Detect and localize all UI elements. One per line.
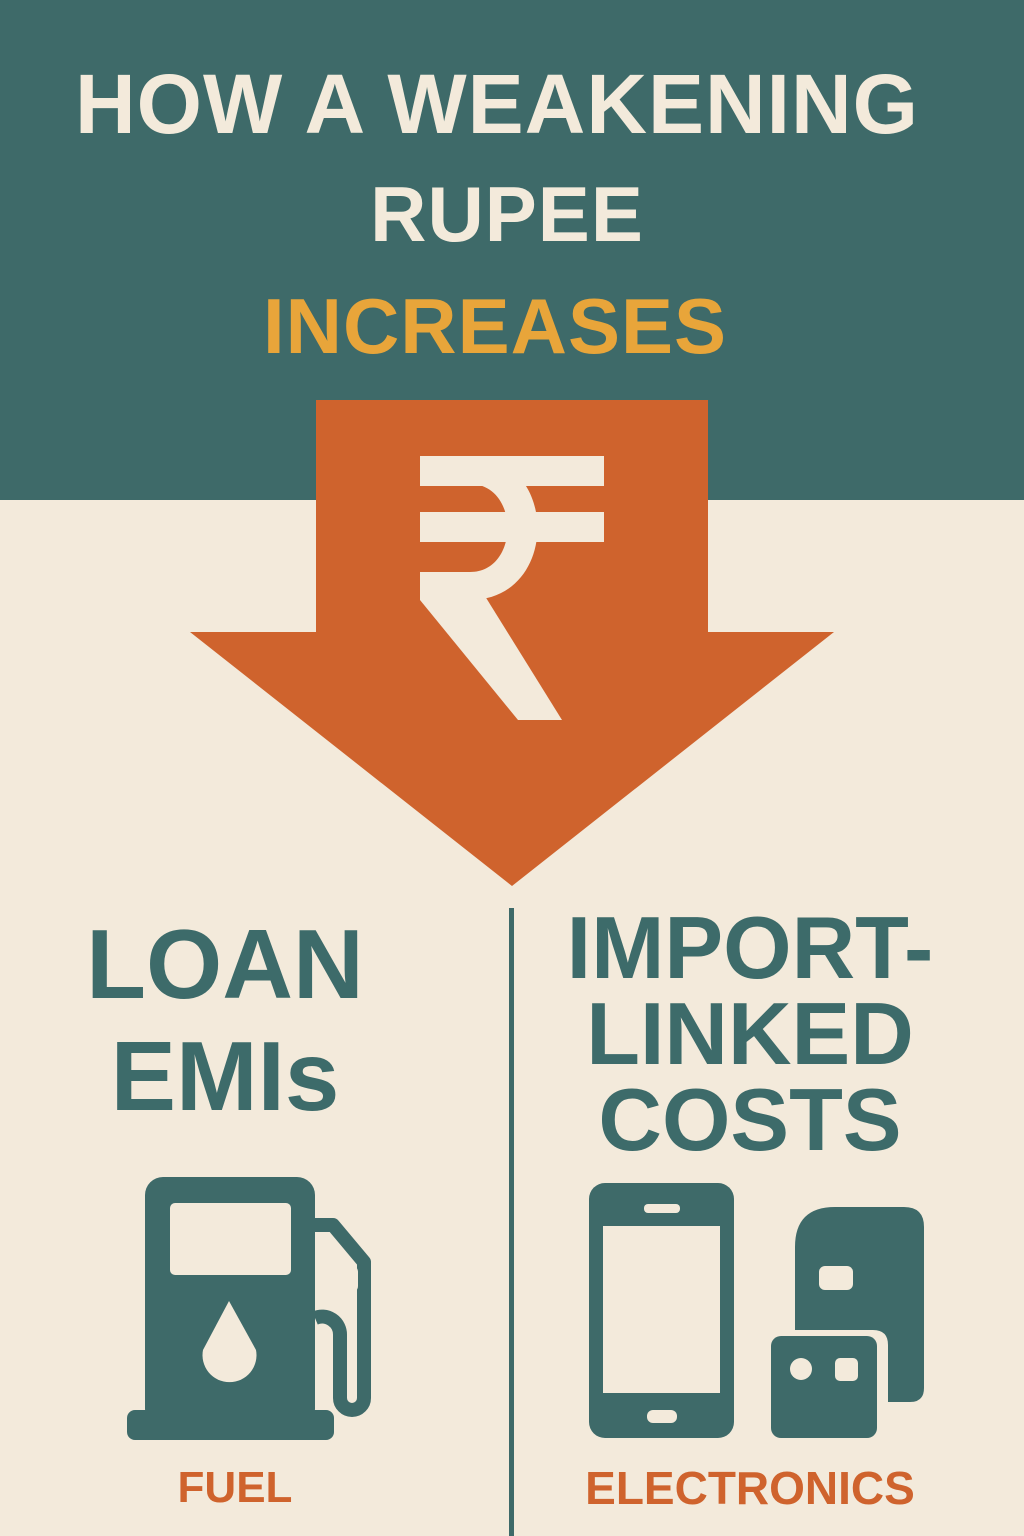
title: HOW A WEAKENING	[75, 57, 919, 151]
heading: loan EMIs: EMIs	[111, 1021, 339, 1131]
heading: loan EMIs: LOAN	[86, 909, 364, 1019]
heading: import-linked costs: COSTS	[598, 1070, 902, 1169]
label: electronics: ELECTRONICS	[585, 1462, 915, 1514]
title: INCREASES	[263, 282, 727, 370]
icon: rupee	[420, 456, 604, 720]
label: fuel: FUEL	[178, 1463, 292, 1512]
arrow with rupee	[190, 400, 834, 886]
heading: import-linked costs	[567, 898, 933, 1169]
icon: fuel pump	[127, 1177, 371, 1440]
divider	[509, 908, 514, 1536]
heading: import-linked costs: IMPORT-	[567, 898, 933, 997]
title: RUPEE	[370, 170, 644, 258]
title	[75, 57, 919, 370]
icon: electronics	[589, 1183, 924, 1438]
heading: loan EMIs	[86, 909, 364, 1131]
heading: import-linked costs: LINKED	[586, 984, 914, 1083]
header band	[0, 0, 1024, 500]
